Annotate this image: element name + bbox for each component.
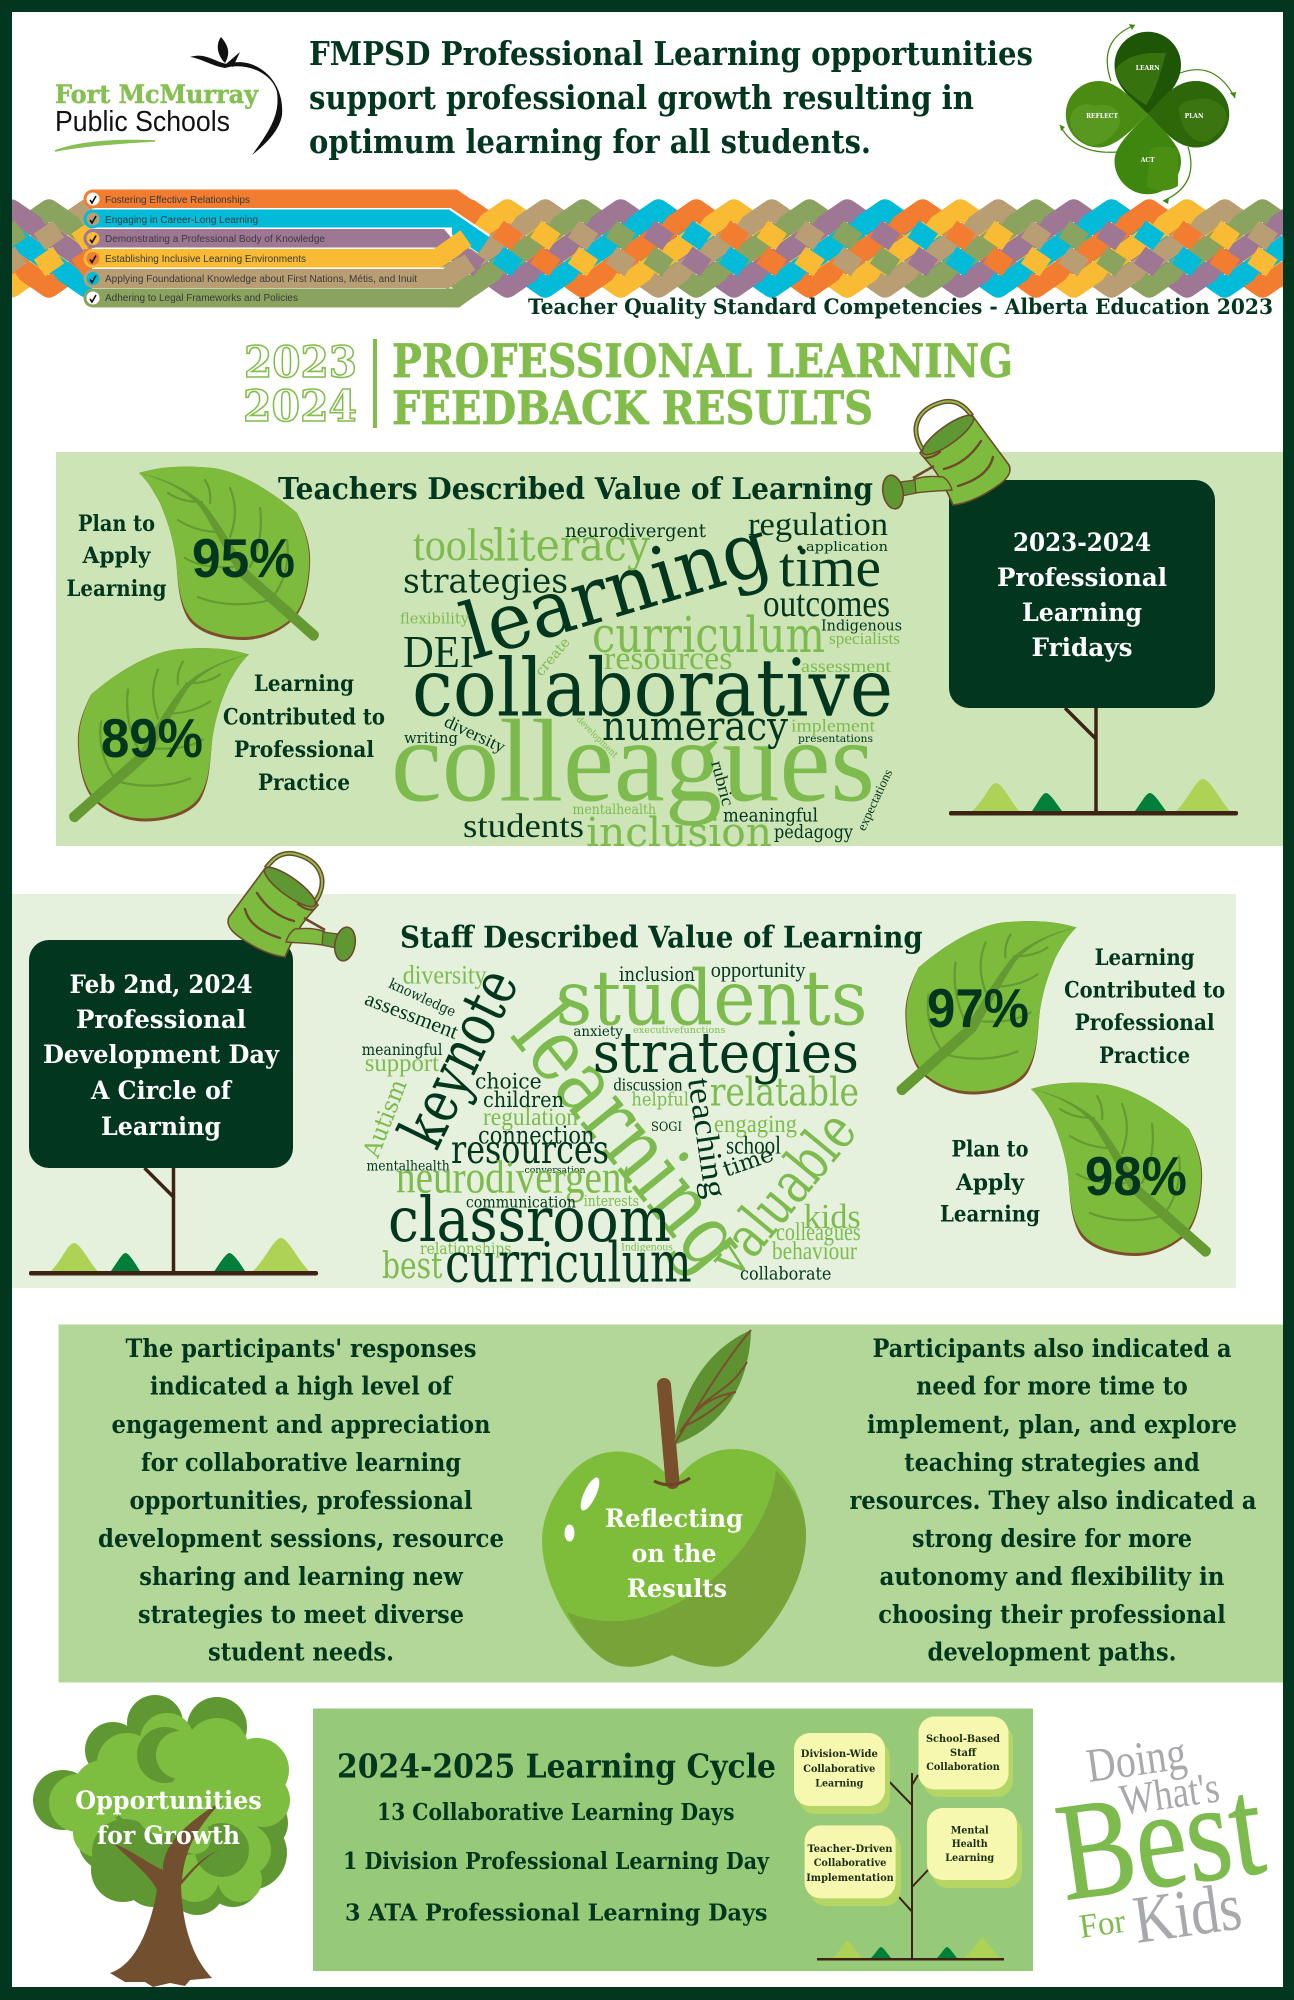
word cloud: staff: anxiety xyxy=(573,1024,623,1040)
woven competencies band xyxy=(0,210,1294,288)
icon: watering can xyxy=(880,401,1010,510)
word cloud: staff: time xyxy=(720,1142,777,1183)
word cloud: teachers: expectations xyxy=(854,767,895,833)
leaf stat 95 percent: 95% xyxy=(192,527,295,589)
word cloud: staff: valuable xyxy=(694,1098,870,1290)
text: learning contributed to professional practice: Learning xyxy=(1095,945,1195,971)
competency ribbons: Applying Foundational Knowledge about First Nations, Métis, and Inuit xyxy=(105,274,417,285)
title xyxy=(309,34,1033,161)
word cloud: staff: relatable xyxy=(710,1071,859,1116)
text: learning contributed to professional practice: Contributed to xyxy=(1064,978,1225,1004)
sign tree: professional learning fridays xyxy=(949,480,1238,816)
sign tree: professional learning fridays: 2023-2024 xyxy=(1013,528,1151,557)
text: participants also indicated: autonomy and flexibility in xyxy=(880,1562,1224,1591)
word cloud: staff: communication xyxy=(466,1194,576,1212)
word cloud: teachers: flexibility xyxy=(400,610,470,628)
word cloud: teachers: tools xyxy=(413,519,495,570)
word cloud: staff: helpful xyxy=(631,1089,689,1111)
logo: doing what's best for kids: Doing xyxy=(1083,1726,1190,1793)
word cloud: staff: knowledge xyxy=(386,976,458,1020)
word cloud: teachers: presentations xyxy=(798,733,873,745)
mini tree diagram: Division-Wide xyxy=(801,1748,878,1760)
word cloud: staff: diversity xyxy=(403,961,486,990)
word cloud: teachers: outcomes xyxy=(763,583,890,625)
word cloud: staff: neurodivergent xyxy=(396,1151,632,1203)
leaf stat 95 percent xyxy=(139,467,319,641)
sign tree: professional development day: Feb 2nd, 2024 xyxy=(70,970,252,999)
word cloud: teachers: time xyxy=(779,537,881,599)
title: optimum learning for all students. xyxy=(309,122,871,161)
text: learning contributed to professional practice: Contributed to xyxy=(223,704,385,730)
icon: tree opportunities for growth: for Growth xyxy=(97,1821,240,1850)
word cloud: teachers: collaborative xyxy=(412,642,893,734)
word cloud: teachers: students xyxy=(463,808,584,845)
word cloud: staff: support xyxy=(365,1050,439,1077)
word cloud: teachers: numeracy xyxy=(602,704,788,750)
text: participants also indicated: strong desire for more xyxy=(912,1524,1192,1553)
icon: learn plan act reflect clover: PLAN xyxy=(1185,113,1204,120)
word cloud: staff xyxy=(357,954,870,1295)
sign tree: professional learning fridays: Fridays xyxy=(1032,633,1132,662)
word cloud: staff: resources xyxy=(451,1128,609,1173)
mini tree diagram: Mental xyxy=(951,1824,989,1836)
text: participants also indicated: development paths. xyxy=(928,1638,1176,1667)
text: participants also indicated: teaching strategies and xyxy=(904,1448,1200,1477)
heading: 2023 2024 feedback results xyxy=(243,334,1013,435)
heading: 2023 2024 feedback results: 2024 xyxy=(243,382,357,432)
word cloud: teachers: neurodivergent xyxy=(565,520,706,542)
leaf stat 97 percent: 97% xyxy=(927,977,1029,1039)
sign tree: professional development day: Development Day xyxy=(43,1040,280,1069)
logo: doing what's best for kids: For xyxy=(1077,1903,1128,1946)
leaf stat 89 percent: 89% xyxy=(101,707,203,769)
logo: doing what's best for kids: Kids xyxy=(1129,1868,1246,1958)
list: learning days: 3 ATA Professional Learning Days xyxy=(345,1900,768,1926)
word cloud: staff: engaging xyxy=(714,1111,797,1138)
word cloud: staff: strategies xyxy=(593,1021,859,1086)
text: participants responses xyxy=(98,1334,504,1667)
word cloud: teachers: development xyxy=(574,715,619,761)
word cloud: staff: meaningful xyxy=(362,1041,442,1059)
title: support professional growth resulting in xyxy=(309,78,974,117)
icon: tree opportunities for growth xyxy=(33,1695,290,1987)
mini tree diagram: Learning xyxy=(815,1778,864,1790)
text: plan to apply learning: Plan to xyxy=(952,1137,1028,1163)
sign tree: professional learning fridays: Professional xyxy=(997,563,1167,592)
heading: 2023 2024 feedback results: 2023 xyxy=(244,338,357,388)
icon: learn plan act reflect clover: ACT xyxy=(1140,157,1155,164)
word cloud: teachers xyxy=(391,502,902,856)
word cloud: staff: behaviour xyxy=(772,1238,858,1265)
text: participants also indicated: choosing their professional xyxy=(878,1600,1226,1629)
mini tree diagram: Collaboration xyxy=(926,1761,1000,1773)
text: plan to apply learning: Plan to xyxy=(78,511,155,537)
word cloud: staff: kids xyxy=(804,1197,861,1236)
word cloud: staff: discussion xyxy=(613,1075,682,1095)
mini tree diagram xyxy=(794,1716,1022,1960)
word cloud: staff: SOGI xyxy=(651,1120,682,1135)
icon: apple: on the xyxy=(632,1539,716,1568)
mini tree diagram: Implementation xyxy=(806,1872,894,1884)
text: participants responses: engagement and appreciation xyxy=(112,1410,490,1439)
text: participants responses: for collaborative learning xyxy=(141,1448,461,1477)
word cloud: staff: school xyxy=(726,1133,781,1160)
word cloud: teachers: writing xyxy=(404,729,458,747)
text: plan to apply learning xyxy=(940,1137,1040,1228)
word cloud: teachers: curriculum xyxy=(592,606,825,664)
text: participants responses: sharing and learning new xyxy=(139,1562,464,1591)
text: learning contributed to professional practice xyxy=(223,671,385,796)
panel heading: Staff Described Value of Learning xyxy=(400,921,923,956)
panel: staff described value of learning xyxy=(12,853,1236,1295)
word cloud: teachers: mentalhealth xyxy=(572,802,656,818)
text: participants responses: strategies to meet diverse xyxy=(138,1600,464,1629)
text: plan to apply learning: Learning xyxy=(940,1202,1040,1228)
text: learning contributed to professional practice: Professional xyxy=(1075,1010,1215,1036)
competency ribbons: Establishing Inclusive Learning Environments xyxy=(105,254,306,265)
word cloud: teachers: implement xyxy=(791,716,875,736)
word cloud: staff: teaching xyxy=(680,1076,733,1200)
text: learning contributed to professional practice xyxy=(1064,945,1225,1069)
word cloud: teachers: create xyxy=(532,635,573,680)
text: participants also indicated: need for more time to xyxy=(916,1372,1188,1401)
leaf stat 89 percent xyxy=(69,648,249,822)
text: participants responses: indicated a high level of xyxy=(150,1372,454,1401)
word cloud: staff: best xyxy=(382,1246,443,1287)
panel: reflecting on the results xyxy=(58,1324,1283,1682)
word cloud: staff: colleagues xyxy=(776,1219,861,1246)
word cloud: staff: classroom xyxy=(388,1183,671,1256)
word cloud: teachers: assessment xyxy=(801,656,891,676)
word cloud: teachers: specialists xyxy=(829,629,900,648)
list: learning days xyxy=(343,1799,770,1926)
word cloud: staff: regulation xyxy=(483,1104,578,1131)
word cloud: teachers: Indigenous xyxy=(821,617,902,635)
panel: 2024-2025 learning cycle xyxy=(313,1708,1033,1971)
word cloud: staff: children xyxy=(483,1088,564,1112)
word cloud: staff: keynote xyxy=(384,957,533,1159)
word cloud: staff: curriculum xyxy=(445,1231,692,1295)
competency ribbons xyxy=(84,190,484,308)
word cloud: teachers: literacy xyxy=(493,521,650,572)
word cloud: staff: collaborate xyxy=(740,1263,831,1284)
competency ribbons: Demonstrating a Professional Body of Knowledge xyxy=(105,234,325,245)
mini tree diagram: School-Based xyxy=(926,1733,1001,1745)
panel heading: Teachers Described Value of Learning xyxy=(278,472,873,507)
sign tree: professional development day: Learning xyxy=(101,1112,221,1141)
heading: 2023 2024 feedback results: PROFESSIONAL LEARNING xyxy=(392,334,1013,388)
word cloud: staff: assessment xyxy=(362,986,462,1044)
competency ribbons: Adhering to Legal Frameworks and Policies xyxy=(105,293,298,304)
text: plan to apply learning xyxy=(66,511,166,602)
list: learning days: 1 Division Professional Learning Day xyxy=(343,1848,770,1875)
text: learning contributed to professional practice: Practice xyxy=(258,770,350,796)
word cloud: teachers: learning xyxy=(452,502,780,678)
word cloud: staff: learning xyxy=(493,984,768,1290)
mini tree diagram: Teacher-Driven xyxy=(808,1843,893,1855)
icon: apple: Reflecting xyxy=(605,1504,743,1533)
text: plan to apply learning: Learning xyxy=(66,576,166,602)
text: learning contributed to professional practice: Practice xyxy=(1099,1043,1190,1069)
word cloud: teachers: meaningful xyxy=(723,804,818,826)
mini tree diagram: Collaborative xyxy=(814,1857,887,1869)
icon: watering can mirrored xyxy=(228,853,358,962)
mini tree diagram: Collaborative xyxy=(803,1763,876,1775)
competency ribbons: Engaging in Career-Long Learning xyxy=(105,215,258,226)
title: FMPSD Professional Learning opportunities xyxy=(309,34,1033,73)
sign tree: professional development day: A Circle of xyxy=(90,1076,233,1105)
logo: doing what's best for kids: What's xyxy=(1117,1762,1222,1825)
logo: Fort McMurray Public Schools: Fort McMurray xyxy=(55,80,259,109)
word cloud: teachers: resources xyxy=(604,641,732,677)
word cloud: staff: executivefunctions xyxy=(633,1025,726,1036)
heading: 2023 2024 feedback results: FEEDBACK RESULTS xyxy=(392,381,873,435)
word cloud: teachers: DEI xyxy=(403,626,474,677)
panel: teachers described value of learning xyxy=(56,401,1283,856)
caption: Teacher Quality Standard Competencies: Teacher Quality Standard Competencies - Alberta Education 2023 xyxy=(528,294,1273,319)
icon: learn plan act reflect clover xyxy=(1060,24,1236,204)
logo: Fort McMurray Public Schools: Public Schools xyxy=(55,106,230,138)
word cloud: staff: inclusion xyxy=(619,962,695,986)
competency ribbons: Fostering Effective Relationships xyxy=(105,195,250,206)
mini tree diagram: Health xyxy=(952,1838,988,1850)
sign tree: professional development day: Professional xyxy=(76,1005,246,1034)
word cloud: staff: interests xyxy=(584,1192,639,1210)
word cloud: teachers: rubric xyxy=(707,758,738,808)
word cloud: teachers: diversity xyxy=(441,711,509,757)
word cloud: staff: mentalhealth xyxy=(366,1158,450,1174)
word cloud: staff: conversation xyxy=(524,1165,586,1176)
leaf stat 97 percent xyxy=(897,921,1076,1095)
text: participants responses: opportunities, professional xyxy=(130,1486,472,1515)
text: participants responses: The participants' responses xyxy=(126,1334,476,1363)
word cloud: teachers: application xyxy=(806,540,889,555)
text: participants responses: development sessions, resource xyxy=(98,1524,504,1553)
text: learning contributed to professional practice: Learning xyxy=(254,671,354,697)
text: participants also indicated: Participants also indicated a xyxy=(872,1334,1232,1363)
panel heading: 2024-2025 Learning Cycle xyxy=(337,1747,776,1786)
word cloud: staff: opportunity xyxy=(711,957,806,982)
text: participants also indicated: resources. They also indicated a xyxy=(850,1486,1256,1515)
logo: Fort McMurray Public Schools xyxy=(55,37,282,155)
word cloud: staff: students xyxy=(556,954,868,1043)
text: learning contributed to professional practice: Professional xyxy=(234,737,374,763)
sign tree: professional development day xyxy=(29,940,318,1276)
text: participants also indicated: implement, plan, and explore xyxy=(867,1410,1237,1439)
text: participants also indicated xyxy=(850,1334,1256,1667)
text: plan to apply learning: Apply xyxy=(82,543,152,569)
mini tree diagram: Staff xyxy=(950,1747,977,1759)
word cloud: teachers: strategies xyxy=(403,562,568,602)
word cloud: staff: Autism xyxy=(357,1075,413,1162)
word cloud: staff: connection xyxy=(478,1122,594,1150)
word cloud: teachers: regulation xyxy=(748,507,888,543)
icon: learn plan act reflect clover: LEARN xyxy=(1136,65,1160,72)
text: plan to apply learning: Apply xyxy=(955,1170,1025,1196)
text: participants responses: student needs. xyxy=(208,1638,394,1667)
icon: tree opportunities for growth: Opportunities xyxy=(75,1786,262,1815)
leaf stat 98 percent: 98% xyxy=(1085,1145,1187,1207)
icon: apple xyxy=(542,1330,806,1667)
word cloud: teachers: colleagues xyxy=(391,696,875,827)
sign tree: professional learning fridays: Learning xyxy=(1022,598,1142,627)
icon: apple: Results xyxy=(627,1574,727,1603)
word cloud: staff: choice xyxy=(475,1070,542,1094)
word cloud: teachers: pedagogy xyxy=(774,821,853,843)
leaf stat 98 percent xyxy=(1031,1083,1211,1257)
mini tree diagram: Learning xyxy=(945,1852,995,1864)
list: learning days: 13 Collaborative Learning Days xyxy=(377,1799,734,1826)
word cloud: teachers: inclusion xyxy=(586,810,772,856)
icon: learn plan act reflect clover: REFLECT xyxy=(1086,113,1118,120)
word cloud: staff: Indigenous xyxy=(621,1240,673,1254)
word cloud: staff: relationships xyxy=(420,1240,511,1258)
